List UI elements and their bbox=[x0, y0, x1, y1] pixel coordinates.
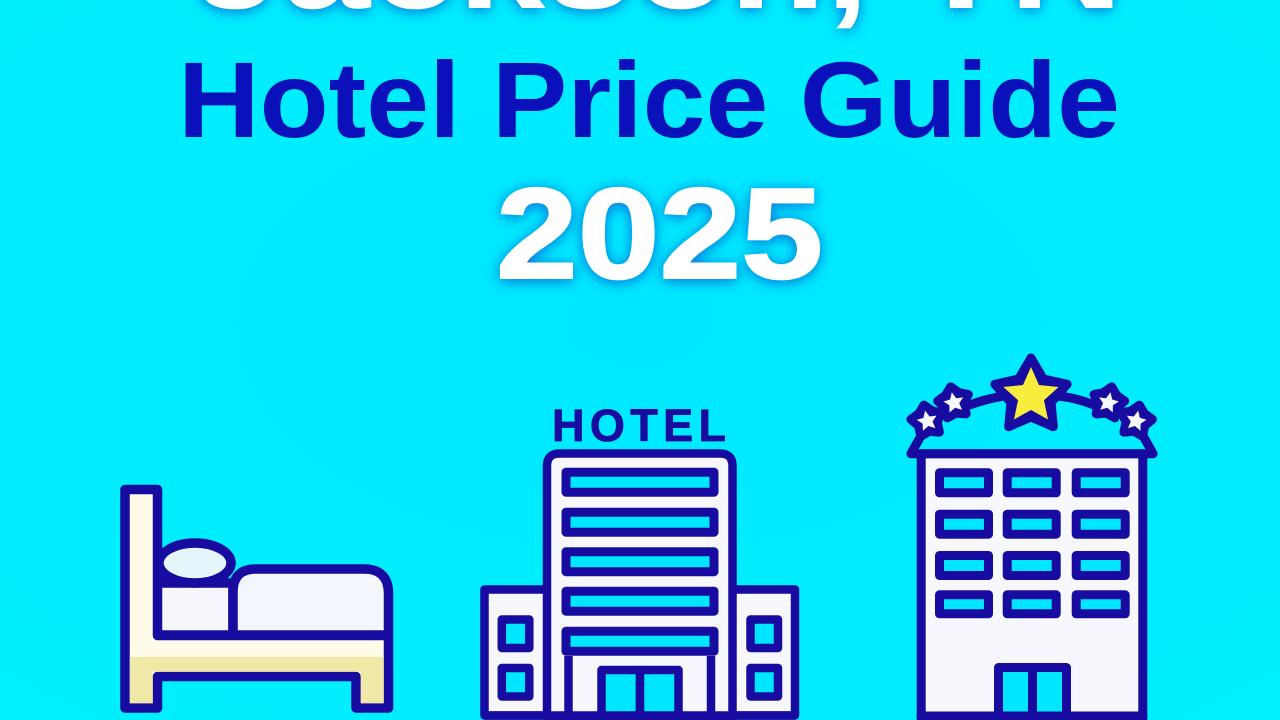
star fill bbox=[1003, 367, 1059, 420]
bed mattress bbox=[233, 569, 388, 635]
star outline bbox=[995, 358, 1067, 427]
icon: five star hotel bbox=[909, 358, 1155, 720]
central tower bbox=[547, 454, 732, 716]
tower window bands bbox=[566, 472, 714, 651]
hotel base line bbox=[484, 711, 795, 720]
icon: hotel building bbox=[484, 400, 795, 720]
big yellow star bbox=[995, 358, 1067, 427]
left wing bbox=[484, 590, 554, 716]
bed frame bbox=[125, 490, 388, 708]
bed frame shaded band bbox=[130, 657, 384, 703]
small star far left bbox=[909, 402, 945, 437]
roof arch bbox=[911, 396, 1153, 454]
entrance doors bbox=[602, 670, 678, 720]
left wing windows bbox=[502, 620, 529, 696]
entrance doors bbox=[998, 668, 1066, 720]
base line bbox=[921, 712, 1143, 720]
bed pillow base bbox=[157, 583, 233, 635]
right wing windows bbox=[750, 620, 778, 696]
right wing bbox=[725, 590, 795, 716]
heading: Hotel Price Guide: Hotel Price Guide bbox=[178, 39, 1120, 160]
icon: bed bbox=[125, 490, 388, 708]
entrance frame bbox=[568, 656, 711, 716]
small star far right bbox=[1118, 402, 1155, 437]
roof bar bbox=[911, 449, 1153, 458]
hotel sign: HOTEL bbox=[552, 400, 726, 451]
building body bbox=[921, 454, 1143, 720]
small star right bbox=[1090, 384, 1127, 419]
windows grid bbox=[940, 473, 1125, 614]
bed pillow bbox=[159, 543, 231, 583]
small star left bbox=[935, 384, 972, 419]
heading: year 2025: 2025 bbox=[496, 162, 823, 306]
